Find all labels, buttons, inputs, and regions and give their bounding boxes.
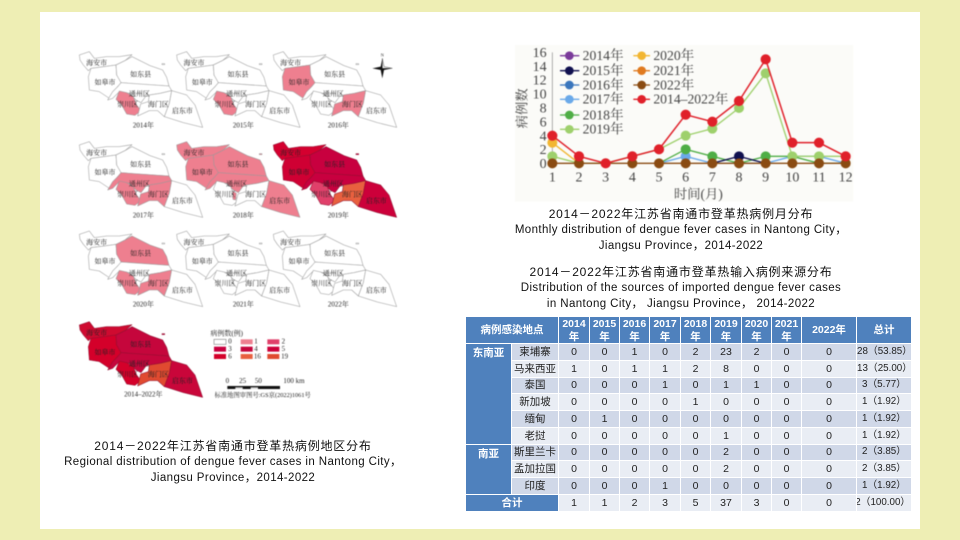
table: imported case sources: 0	[826, 463, 832, 475]
map: 2014: 海安市	[86, 58, 107, 67]
table: imported case sources: 1（1.92）	[862, 396, 906, 407]
map: 2014: 2014年	[133, 120, 154, 129]
table: imported case sources: 0	[693, 480, 698, 492]
map scale bar and approval note: 0	[226, 377, 230, 385]
map: 2014: 通州区	[129, 89, 150, 98]
chart legend: 2016年	[583, 76, 624, 92]
table: imported case sources: 0	[784, 480, 789, 492]
map: 2018	[177, 142, 300, 219]
line chart: monthly cases	[514, 45, 853, 202]
map: 2017: 崇川区	[117, 189, 138, 198]
series: 2014-2022	[548, 55, 850, 168]
table: imported case sources: 0	[632, 480, 637, 492]
table: imported case sources: 1	[754, 379, 759, 391]
table: imported case sources: 0	[754, 396, 759, 408]
caption: regional distribution: Regional distribution of dengue fever cases in Nantong City，	[64, 456, 402, 468]
table: imported case sources: 1	[693, 396, 698, 408]
map scale bar and approval note: 50	[255, 377, 262, 385]
table: imported case sources: 3（5.77）	[862, 379, 906, 390]
map: 2014-2022 total: 启东市	[172, 376, 193, 385]
series: 2019	[548, 69, 846, 163]
chart legend: 2021年	[653, 62, 695, 78]
chart legend: 2014–2022年	[653, 91, 729, 107]
x axis tick labels: 12	[839, 170, 853, 185]
table: imported case sources: 0	[662, 430, 668, 442]
map legend	[210, 329, 289, 360]
table: imported case sources: 0	[571, 396, 577, 408]
icon: north compass: N	[381, 52, 385, 57]
table: imported case sources: 1	[662, 480, 668, 492]
table: imported case sources: 2	[723, 463, 729, 475]
table: imported case sources: 0	[662, 463, 668, 475]
map: 2019: 崇川区	[311, 189, 332, 198]
table: imported case sources: 0	[784, 463, 789, 475]
map: 2017	[79, 142, 203, 219]
table: imported case sources: 0	[693, 413, 698, 425]
map: 2014-2022 total	[79, 322, 203, 399]
map: 2020: 2020年	[133, 300, 154, 309]
table: imported case sources: 3	[754, 497, 759, 509]
map: 2021: 通州区	[226, 268, 247, 277]
table: imported case sources: 2019年	[714, 318, 738, 342]
map legend: 2	[282, 338, 286, 346]
map: 2022: 通州区	[323, 268, 344, 277]
table: imported case sources: 0	[632, 463, 637, 475]
caption: regional distribution: 2014－2022年江苏省南通市登革热病例地区分布	[94, 439, 372, 453]
table: imported case sources: 2015年	[593, 318, 616, 342]
table: imported case sources: 0	[693, 430, 698, 442]
table: imported case sources: 0	[826, 396, 832, 408]
caption: monthly distribution: 2014－2022年江苏省南通市登革热病例月分布	[549, 207, 813, 221]
table: imported case sources: 0	[826, 413, 832, 425]
map scale bar and approval note	[215, 377, 312, 399]
table: imported case sources: 0	[602, 396, 607, 408]
table: imported case sources: 0	[662, 446, 668, 458]
table: imported case sources: 0	[632, 396, 637, 408]
table: imported case sources: 1	[571, 363, 577, 375]
table: imported case sources: 0	[571, 430, 577, 442]
map: 2015: 海门区	[245, 99, 266, 108]
map: 2014: 启东市	[172, 106, 193, 115]
map: 2015: 崇川区	[215, 99, 235, 108]
table: imported case sources: 0	[754, 463, 759, 475]
map: 2019: 海安市	[280, 148, 301, 157]
table: imported case sources: 0	[784, 379, 789, 391]
map legend: 4	[254, 345, 258, 353]
caption: monthly distribution: Jiangsu Province，2014-2022	[599, 240, 763, 252]
table: imported case sources: 2	[632, 497, 637, 509]
x axis tick labels: 5	[655, 170, 662, 185]
map: 2019: 如东县	[324, 159, 345, 168]
map legend: 3	[228, 345, 232, 353]
table: imported case sources: 0	[602, 446, 607, 458]
table: imported case sources: 0	[784, 413, 789, 425]
map legend: 19	[281, 352, 289, 360]
table: imported case sources: 0	[754, 430, 759, 442]
map: 2019: 如皋市	[289, 167, 309, 176]
x axis tick labels: 11	[812, 170, 826, 185]
map legend: 6	[228, 352, 232, 360]
table: imported case sources: 2014年	[562, 318, 586, 342]
table: imported case sources: 1	[723, 430, 729, 442]
table: imported case sources: 3	[662, 497, 668, 509]
map: 2018: 通州区	[226, 179, 247, 188]
map legend: 0	[228, 338, 232, 346]
table: imported case sources: 0	[632, 413, 637, 425]
x axis tick labels: 9	[762, 170, 769, 185]
map: 2015: 启东市	[269, 106, 290, 115]
map: 2021	[177, 231, 300, 309]
table: imported case sources: 0	[632, 446, 637, 458]
map legend: 1	[254, 338, 258, 346]
map: 2020: 启东市	[172, 285, 193, 294]
table: imported case sources: 老挝	[524, 430, 546, 442]
table: imported case sources: 南亚	[478, 448, 499, 460]
y axis tick labels: 0	[540, 157, 547, 172]
table: imported case sources: 0	[662, 396, 668, 408]
table: imported case sources: 2（3.85）	[862, 446, 906, 457]
table: imported case sources: 0	[693, 446, 698, 458]
table: imported case sources: 0	[784, 446, 789, 458]
table: imported case sources: 合计	[502, 497, 522, 509]
table: imported case sources: 2	[723, 446, 729, 458]
map: 2014: 如东县	[130, 69, 151, 78]
map: 2017: 海安市	[86, 148, 107, 157]
y axis tick labels: 16	[533, 46, 547, 61]
table: imported case sources: 0	[754, 446, 759, 458]
table: imported case sources: 0	[754, 363, 759, 375]
x axis tick labels: 6	[682, 170, 689, 185]
map: 2018: 崇川区	[215, 189, 235, 198]
map: 2016: 崇川区	[311, 99, 332, 108]
table: imported case sources: 孟加拉国	[514, 463, 556, 475]
table: imported case sources: 2017年	[653, 318, 677, 342]
map: 2014-2022 total: 如皋市	[95, 347, 115, 356]
map: 2017: 通州区	[129, 179, 150, 188]
table: imported case sources: 1（1.92）	[862, 413, 906, 424]
chart legend: 2018年	[583, 106, 624, 122]
series: 2022	[548, 159, 850, 168]
map: 2020: 海安市	[86, 237, 107, 246]
y axis tick labels: 6	[540, 115, 547, 130]
table: imported case sources: 1	[662, 363, 668, 375]
map: 2016	[273, 52, 397, 129]
table: imported case sources: 0	[754, 480, 759, 492]
map: 2015: 海安市	[184, 58, 204, 67]
map: 2017: 海门区	[148, 189, 169, 198]
table: imported case sources: 0	[571, 346, 577, 358]
chart legend: 2022年	[653, 76, 695, 92]
table: imported case sources: 0	[826, 497, 832, 509]
chart legend: 2017年	[583, 91, 624, 107]
map: 2019: 2019年	[328, 210, 349, 219]
map: 2015: 2015年	[233, 120, 254, 129]
map: 2019: 启东市	[366, 196, 387, 205]
map: 2015	[177, 52, 300, 129]
map: 2016: 通州区	[323, 89, 344, 98]
table: imported case sources: 0	[826, 379, 832, 391]
table: imported case sources: 泰国	[524, 379, 546, 391]
x axis tick labels: 7	[709, 170, 716, 185]
map: 2021: 如皋市	[192, 257, 213, 266]
map: 2020: 海门区	[148, 279, 169, 288]
table: imported case sources: 斯里兰卡	[514, 446, 556, 458]
caption: sources of imported cases: in Nantong City， Jiangsu Province， 2014-2022	[547, 298, 815, 310]
y axis tick labels: 14	[533, 60, 547, 75]
table: imported case sources: 0	[693, 463, 698, 475]
map scale bar and approval note: 25	[239, 377, 247, 385]
map: 2019: 海门区	[342, 189, 363, 198]
table: imported case sources: 1	[632, 363, 637, 375]
table: imported case sources: 2016年	[623, 318, 646, 342]
table: imported case sources: 缅甸	[524, 413, 546, 425]
map: 2020: 通州区	[129, 268, 150, 277]
chart legend	[560, 47, 729, 137]
table: imported case sources: 0	[784, 363, 789, 375]
map: 2018: 如皋市	[192, 167, 213, 176]
map: 2016: 如东县	[324, 69, 345, 78]
map: 2014-2022 total: 2014–2022年	[124, 390, 163, 399]
caption: sources of imported cases: 2014－2022年江苏省南通市登革热输入病例来源分布	[530, 265, 832, 279]
map: 2017: 2017年	[133, 210, 154, 219]
table: imported case sources: 0	[826, 363, 832, 375]
caption: regional distribution	[64, 439, 402, 484]
table: imported case sources: 病例感染地点	[480, 324, 544, 336]
y axis tick labels	[533, 46, 547, 172]
y axis tick labels: 10	[533, 88, 547, 103]
table: imported case sources: 0	[632, 430, 637, 442]
map: 2022: 海门区	[342, 279, 363, 288]
x axis tick labels: 3	[602, 170, 609, 185]
caption: sources of imported cases: Distribution of the sources of imported dengue fever cases	[521, 282, 841, 294]
table: imported case sources: 23	[720, 346, 732, 358]
table: imported case sources: 0	[826, 346, 832, 358]
table: imported case sources: 0	[571, 446, 577, 458]
table: imported case sources: 0	[602, 430, 607, 442]
table: imported case sources: 0	[571, 463, 577, 475]
y axis tick labels: 8	[540, 102, 547, 117]
map: 2017: 启东市	[172, 196, 193, 205]
series: 2020	[548, 138, 579, 163]
table: imported case sources: 0	[723, 396, 729, 408]
map: 2014: 海门区	[148, 99, 169, 108]
table: imported case sources: 1	[723, 379, 729, 391]
table: imported case sources: 8	[723, 363, 729, 375]
table: imported case sources: 2022年	[812, 324, 846, 336]
map scale bar and approval note: 100 km	[283, 377, 305, 385]
table: imported case sources: 2020年	[745, 318, 768, 342]
x axis tick labels: 10	[785, 170, 799, 185]
map: 2017: 如东县	[130, 159, 151, 168]
map legend: 病例数(例)	[210, 329, 244, 338]
map: 2021: 如东县	[228, 249, 248, 258]
map: 2018: 海门区	[245, 189, 266, 198]
map: 2015: 通州区	[226, 89, 247, 98]
table: imported case sources: 1	[602, 413, 607, 425]
table: imported case sources: 柬埔寨	[519, 346, 551, 358]
table: imported case sources: 0	[602, 346, 607, 358]
table: imported case sources: 0	[784, 430, 789, 442]
map: 2016: 海安市	[280, 58, 301, 67]
table: imported case sources: 28（53.85）	[857, 346, 912, 357]
map: 2016: 如皋市	[289, 77, 309, 86]
table: imported case sources: 0	[693, 379, 698, 391]
chart legend: 2015年	[583, 62, 624, 78]
caption: monthly distribution	[515, 207, 847, 252]
chart legend: 2020年	[653, 47, 695, 63]
table: imported case sources: 2021年	[775, 318, 798, 342]
table: imported case sources: 2018年	[684, 318, 707, 342]
table: imported case sources: 0	[784, 346, 789, 358]
x axis tick labels: 4	[629, 170, 636, 185]
table: imported case sources: 0	[632, 379, 637, 391]
table: imported case sources: 0	[662, 346, 668, 358]
map: 2022: 如皋市	[289, 257, 309, 266]
table: imported case sources: 0	[784, 396, 789, 408]
map: 2022: 崇川区	[311, 279, 332, 288]
map: 2021: 海门区	[245, 279, 266, 288]
table: imported case sources: 马来西亚	[514, 363, 556, 375]
map: 2019: 通州区	[323, 179, 344, 188]
map: 2022: 2022年	[328, 300, 349, 309]
x axis tick labels	[549, 170, 853, 185]
chart legend: 2014年	[583, 47, 624, 63]
series: 2018	[659, 145, 846, 163]
table: imported case sources: 0	[784, 497, 789, 509]
map: 2014-2022 total: 崇川区	[117, 369, 138, 378]
map scale bar and approval note: 标准地图审图号:GS京(2022)1061号	[215, 390, 312, 399]
table: imported case sources: 0	[602, 480, 607, 492]
map: 2014-2022 total: 通州区	[129, 359, 150, 368]
map: 2015: 如东县	[228, 69, 248, 78]
map: 2018: 启东市	[269, 196, 290, 205]
map: 2020: 如东县	[130, 249, 151, 258]
table: imported case sources: 0	[571, 379, 577, 391]
caption: regional distribution: Jiangsu Province，2014-2022	[151, 472, 315, 484]
table: imported case sources: 0	[723, 480, 729, 492]
table: imported case sources: 2（3.85）	[862, 463, 906, 474]
map: 2017: 如皋市	[95, 167, 115, 176]
map: 2016: 启东市	[366, 106, 387, 115]
table: imported case sources: 1	[602, 497, 607, 509]
map: 2016: 海门区	[342, 99, 363, 108]
table: imported case sources: 0	[826, 430, 832, 442]
map: 2014-2022 total: 海安市	[86, 328, 107, 337]
map: 2022: 启东市	[366, 285, 387, 294]
map: 2016: 2016年	[328, 120, 349, 129]
table: imported case sources	[466, 317, 912, 511]
map: 2021: 海安市	[184, 237, 204, 246]
series: 2015	[712, 152, 766, 163]
table: imported case sources: 0	[826, 446, 832, 458]
table: imported case sources: 总计	[874, 324, 894, 336]
y axis tick labels: 12	[533, 74, 547, 89]
chart legend: 2019年	[583, 121, 624, 137]
series: 2017	[659, 152, 846, 163]
x axis tick labels: 1	[549, 170, 556, 185]
x axis tick labels: 8	[735, 170, 742, 185]
table: imported case sources: 5	[693, 497, 698, 509]
table: imported case sources: 1（1.92）	[862, 480, 906, 491]
caption: sources of imported cases	[521, 265, 841, 310]
map: 2020: 如皋市	[95, 257, 115, 266]
map: 2022: 海安市	[280, 237, 301, 246]
map: 2014: 如皋市	[95, 77, 115, 86]
map legend: 5	[282, 345, 286, 353]
table: imported case sources: 0	[571, 480, 577, 492]
map: 2021: 崇川区	[215, 279, 235, 288]
x axis tick labels: 2	[575, 170, 582, 185]
table: imported case sources: 13（25.00）	[857, 363, 912, 374]
map: 2014	[79, 52, 203, 129]
table: imported case sources: 0	[723, 413, 729, 425]
map: 2015: 如皋市	[192, 77, 213, 86]
map: 2021: 2021年	[233, 300, 254, 309]
map: 2018: 2018年	[233, 210, 254, 219]
map: 2022	[273, 231, 397, 309]
table: imported case sources: 0	[662, 413, 668, 425]
map: 2014: 崇川区	[117, 99, 138, 108]
map: 2020: 崇川区	[117, 279, 138, 288]
x axis title: 时间(月)	[674, 187, 723, 202]
table: imported case sources: 0	[826, 480, 832, 492]
map: 2018: 如东县	[228, 159, 248, 168]
table: imported case sources: 37	[720, 497, 732, 509]
map: 2019	[273, 142, 397, 219]
map: 2022: 如东县	[324, 249, 345, 258]
map: 2018: 海安市	[184, 148, 204, 157]
table: imported case sources: 2	[754, 346, 759, 358]
map: 2021: 启东市	[269, 285, 290, 294]
map: 2014-2022 total: 海门区	[148, 369, 169, 378]
table: imported case sources: 0	[754, 413, 759, 425]
caption: monthly distribution: Monthly distribution of dengue fever cases in Nantong City，	[515, 224, 847, 236]
map: 2014-2022 total: 如东县	[130, 339, 151, 348]
table: imported case sources: 1	[571, 497, 577, 509]
table: imported case sources: 1	[632, 346, 637, 358]
table: imported case sources: 0	[571, 413, 577, 425]
table: imported case sources: 0	[602, 379, 607, 391]
table: imported case sources: 东南亚	[473, 347, 504, 359]
table: imported case sources: 2	[693, 363, 698, 375]
table: imported case sources: 新加坡	[519, 396, 551, 408]
y axis tick labels: 4	[540, 129, 547, 144]
map: 2020	[79, 231, 203, 309]
chart axes	[552, 52, 846, 163]
y axis tick labels: 2	[540, 143, 547, 158]
y axis title: 病例数	[514, 88, 530, 128]
table: imported case sources: 1（1.92）	[862, 430, 906, 441]
table: imported case sources: 0	[602, 463, 607, 475]
table: imported case sources: 2	[693, 346, 698, 358]
icon: north compass	[372, 52, 392, 78]
table: imported case sources: 0	[602, 363, 607, 375]
table: imported case sources: 1	[662, 379, 668, 391]
map legend: 16	[254, 352, 261, 360]
table: imported case sources: 印度	[524, 480, 546, 492]
